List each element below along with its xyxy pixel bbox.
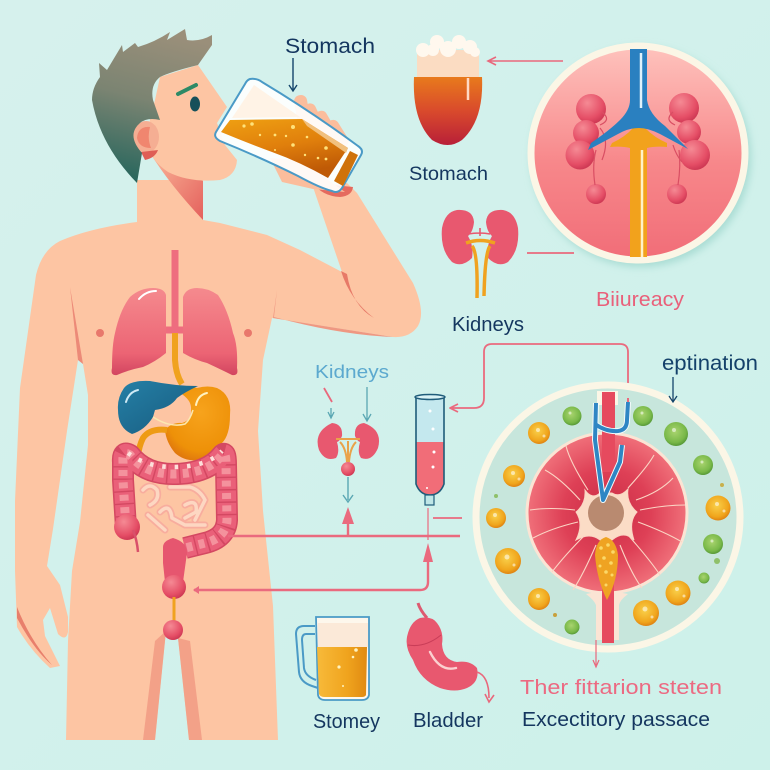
blue ducts bbox=[595, 402, 628, 500]
small bladder bbox=[341, 462, 355, 476]
label: eptination: eptination bbox=[662, 352, 758, 375]
organs inside torso bbox=[96, 250, 252, 640]
oesophagus bbox=[175, 333, 182, 384]
arrow: circle to stomach bbox=[488, 57, 563, 65]
liver bbox=[118, 381, 198, 434]
panel: kidney magnified circle bbox=[531, 46, 751, 267]
figure: man drinking bbox=[15, 29, 421, 740]
arrow marks bbox=[328, 387, 371, 421]
particle speckles bbox=[493, 412, 726, 618]
fatty plug and lower tube bbox=[586, 537, 628, 643]
ureters bbox=[336, 439, 360, 462]
icon: foamy beer stomach bbox=[414, 35, 482, 145]
red tissue disc bbox=[527, 433, 687, 593]
duodenum bbox=[138, 430, 167, 456]
lower circle bbox=[163, 620, 183, 640]
connector stub bbox=[627, 398, 629, 402]
dotted outflow arrow bbox=[593, 640, 599, 667]
label: filtration system: Ther fittarion steten bbox=[520, 677, 722, 699]
label: excretory passage: Excectitory passace bbox=[522, 709, 710, 731]
arrow: bladder return bbox=[194, 555, 428, 590]
connector arrows bbox=[194, 344, 628, 590]
tube outflow bbox=[427, 508, 429, 540]
arrow: up to kidney bbox=[347, 514, 349, 536]
label: Bladder: Bladder bbox=[413, 710, 483, 732]
blue vessel bbox=[588, 49, 688, 150]
organ highlights bbox=[126, 390, 138, 402]
kidney pair bbox=[318, 423, 379, 459]
short tick bbox=[433, 517, 462, 519]
body shadow details bbox=[17, 183, 393, 740]
head bbox=[145, 65, 237, 181]
stomach organ bbox=[165, 386, 230, 460]
icon: kidneys bbox=[442, 210, 518, 298]
neck shadow bbox=[150, 153, 203, 220]
line: kidneys to circle bbox=[527, 252, 574, 254]
ear bbox=[133, 121, 159, 160]
right lung bbox=[183, 288, 237, 375]
outflow arrow bbox=[343, 477, 353, 502]
eyebrow bbox=[178, 85, 196, 94]
label: Kidneys: Kidneys bbox=[452, 314, 524, 336]
caecum and appendix bbox=[114, 514, 140, 552]
label: Stomach: Stomach bbox=[409, 163, 488, 185]
top stomach label: Stomach bbox=[285, 35, 375, 58]
label: Biiureacy: Biiureacy bbox=[596, 289, 684, 311]
line: colon to circle bbox=[228, 535, 460, 537]
outer ring bbox=[476, 385, 740, 649]
orange ureter branch bbox=[610, 128, 667, 257]
left lung bbox=[112, 288, 166, 375]
top stomach label bbox=[285, 35, 375, 91]
hand fingers bbox=[270, 94, 351, 192]
hair bbox=[92, 29, 212, 183]
eye bbox=[190, 96, 200, 112]
tissue spokes bbox=[530, 446, 685, 590]
label: Kidneys blue: Kidneys bbox=[315, 362, 389, 382]
small intestine bbox=[143, 486, 205, 530]
particles bbox=[486, 406, 730, 634]
panel: filtration cross-section bbox=[476, 385, 740, 649]
upper vessel bbox=[602, 392, 615, 472]
kidney lobes left bbox=[566, 94, 607, 204]
test tube bbox=[415, 394, 445, 505]
pipe: filter to test tube bbox=[450, 344, 628, 412]
upper red tube bbox=[597, 391, 618, 405]
label: Stomey: Stomey bbox=[313, 711, 380, 733]
circle disc bbox=[531, 46, 745, 260]
rectum bbox=[163, 538, 187, 582]
large intestine bbox=[123, 451, 227, 548]
lung highlights bbox=[139, 291, 156, 299]
bladder circle bbox=[162, 575, 186, 599]
icon: beer mug bbox=[296, 617, 369, 700]
arrow: eptination pointer bbox=[669, 377, 677, 402]
body silhouette bbox=[15, 180, 421, 740]
trachea bbox=[166, 250, 183, 330]
small kidney diagram bbox=[315, 362, 389, 502]
blue duct outline bbox=[595, 402, 628, 500]
kidney lobes right bbox=[667, 93, 710, 204]
urethra bbox=[172, 597, 176, 628]
arrowheads bbox=[193, 507, 433, 594]
beer glass bbox=[215, 79, 362, 192]
brown centre bbox=[588, 495, 624, 531]
icon: bladder organ bbox=[407, 603, 494, 702]
nipples bbox=[96, 329, 252, 337]
arrow: to glass bbox=[289, 58, 297, 91]
pink slash bbox=[324, 388, 332, 402]
